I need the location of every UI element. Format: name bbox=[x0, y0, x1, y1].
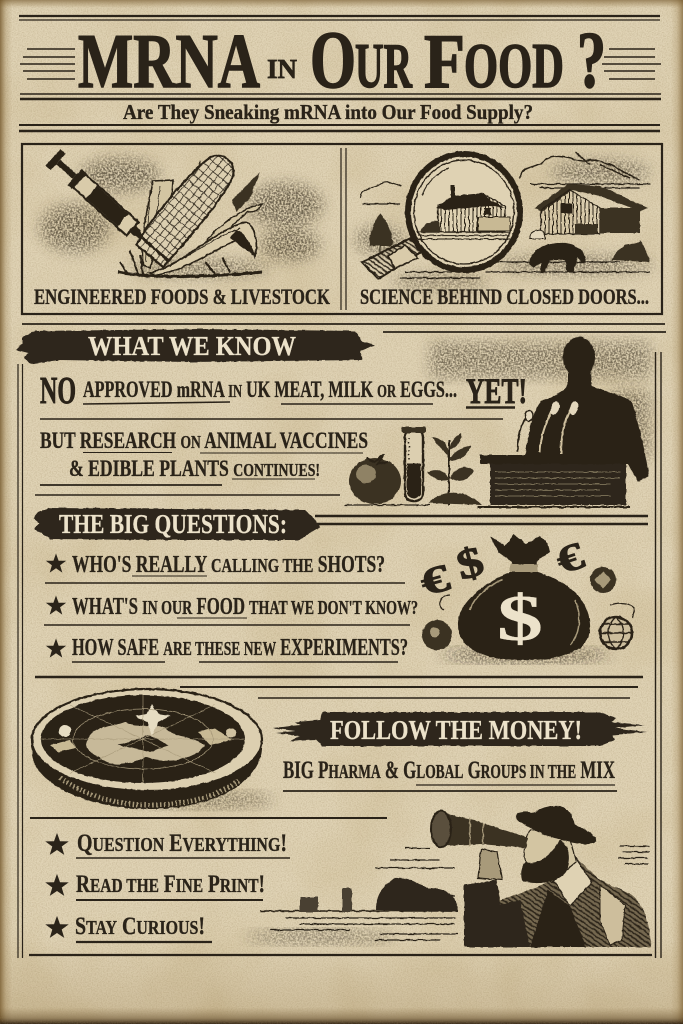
title: IN bbox=[267, 54, 297, 84]
text block: big pharma: BIG PHARMA & GLOBAL GROUPS IN THE MIX bbox=[283, 757, 615, 784]
illustration: money bag with currency symbols bbox=[416, 534, 634, 662]
illustration: man with spyglass bbox=[431, 806, 651, 947]
action: stay curious: STAY CURIOUS! bbox=[75, 913, 205, 940]
illustration: money bag with currency symbols: € bbox=[416, 557, 454, 605]
title: ? bbox=[577, 17, 606, 105]
text block: research continues: & EDIBLE PLANTS CONTINUES! bbox=[69, 456, 320, 481]
section banner: the big questions: THE BIG QUESTIONS: bbox=[59, 509, 287, 539]
text block: research continues bbox=[40, 428, 368, 485]
title: UR bbox=[355, 31, 413, 101]
subtitle: Are They Sneaking mRNA into Our Food Supply? bbox=[123, 100, 533, 124]
bullet list: calls to action bbox=[45, 830, 290, 942]
title: OOD bbox=[464, 31, 564, 101]
panel: top illustrations bbox=[22, 144, 662, 314]
illustration: flat earth disc bbox=[32, 689, 275, 809]
section banner: what we know: WHAT WE KNOW bbox=[88, 331, 296, 361]
section rules and frame bbox=[18, 324, 666, 958]
text block: research continues: BUT RESEARCH ON ANIMAL VACCINES bbox=[40, 428, 368, 453]
title: MRNA bbox=[78, 18, 260, 104]
illustration: tomato, test tube and plant bbox=[345, 427, 482, 505]
masthead rules bbox=[19, 16, 661, 131]
illustration: magnifying glass over farm bbox=[355, 152, 655, 289]
illustration: money bag with currency symbols: $ bbox=[497, 582, 543, 655]
text block: no approved mrna: NO bbox=[40, 370, 76, 412]
panel caption: engineered foods: ENGINEERED FOODS & LIVESTOCK bbox=[34, 284, 330, 309]
illustration: money bag with currency symbols: € bbox=[551, 535, 589, 583]
title: O bbox=[310, 14, 356, 105]
action: question everything: QUESTION EVERYTHING! bbox=[77, 830, 287, 857]
question: what is in our food: WHAT'S IN OUR FOOD THAT WE DON'T KNOW? bbox=[72, 594, 418, 620]
title: F bbox=[424, 18, 465, 104]
section banner: follow the money: FOLLOW THE MONEY! bbox=[330, 715, 582, 745]
question: how safe: HOW SAFE ARE THESE NEW EXPERIMENTS? bbox=[72, 635, 408, 661]
illustration: syringe in corn cob bbox=[40, 147, 323, 277]
action: read the fine print: READ THE FINE PRINT! bbox=[76, 871, 265, 898]
text block: no approved mrna: YET! bbox=[466, 371, 527, 411]
illustration: speaker at podium with microphones bbox=[430, 337, 650, 507]
illustration: landscape horizon bbox=[245, 848, 458, 944]
text block: no approved mrna bbox=[40, 370, 527, 412]
text block: no approved mrna: APPROVED mRNA IN UK MEAT, MILK OR EGGS... bbox=[83, 377, 457, 402]
question: who is calling the shots: WHO'S REALLY CALLING THE SHOTS? bbox=[72, 552, 385, 578]
title bbox=[78, 14, 606, 105]
illustration: money bag with currency symbols: $ bbox=[452, 538, 489, 590]
section banner: what we know bbox=[16, 329, 375, 364]
bullet list: big questions bbox=[46, 552, 418, 662]
